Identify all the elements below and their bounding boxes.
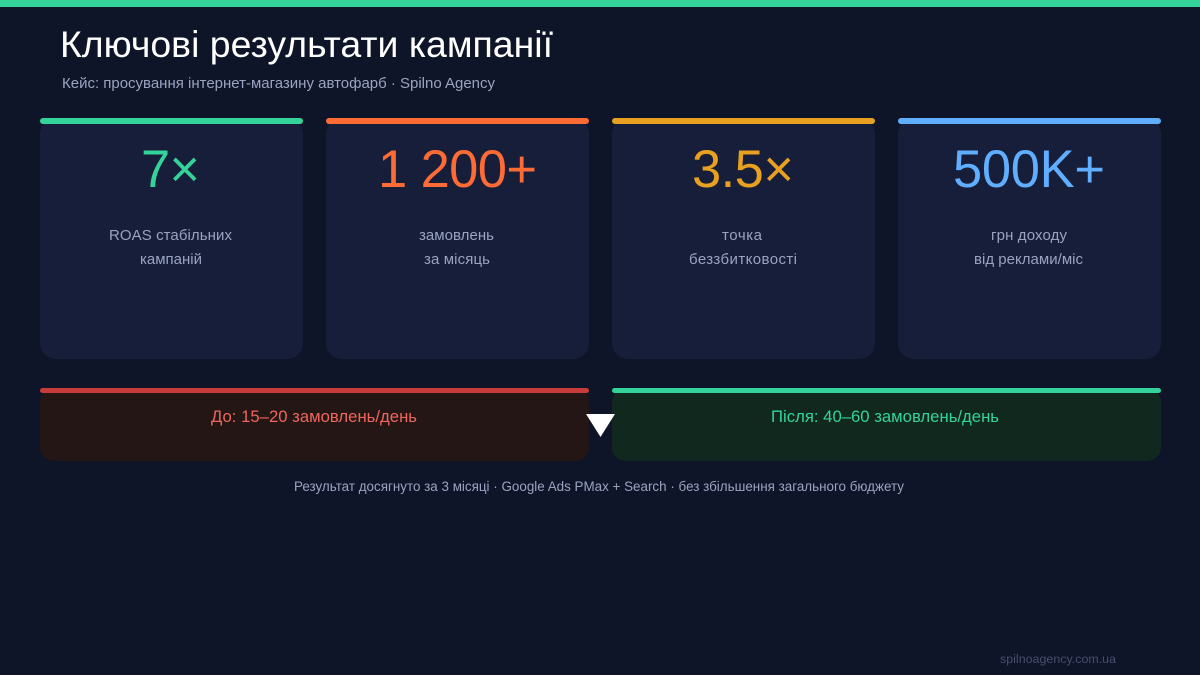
footnote: Результат досягнуто за 3 місяці · Google Ads PMax + Search · без збільшення загального бюджету bbox=[294, 479, 904, 494]
subtitle: Кейс: просування інтернет-магазину автофарб · Spilno Agency bbox=[62, 75, 496, 92]
label: ROAS: ROAS стабільних bbox=[109, 227, 232, 244]
panel: before bbox=[40, 388, 589, 461]
metric: 3.5x: 3.5× bbox=[692, 140, 794, 199]
title: Ключові результати кампанії bbox=[60, 23, 554, 65]
metric: 7x: 7× bbox=[141, 140, 200, 199]
label: break-even bbox=[689, 227, 797, 268]
website: spilnoagency.com.ua bbox=[1000, 652, 1116, 666]
metric: 500K+: 500K+ bbox=[953, 140, 1105, 199]
metric: 1200+: 1 200+ bbox=[378, 140, 537, 199]
label: orders bbox=[419, 227, 494, 268]
panel: revenue bbox=[898, 118, 1161, 359]
panel: break-even bbox=[612, 118, 875, 359]
label: revenue: від реклами/міс bbox=[974, 251, 1084, 268]
after text: Після: 40–60 замовлень/день bbox=[771, 407, 999, 426]
top accent bar bbox=[0, 0, 1200, 7]
label: revenue: грн доходу bbox=[991, 227, 1068, 244]
panel: ROAS bbox=[40, 118, 303, 359]
panel: orders bbox=[326, 118, 589, 359]
before text: До: 15–20 замовлень/день bbox=[211, 407, 417, 426]
label: break-even: точка bbox=[722, 227, 763, 244]
label: orders: за місяць bbox=[424, 251, 490, 268]
panel: after bbox=[612, 388, 1161, 461]
label: revenue bbox=[974, 227, 1084, 268]
label: break-even: беззбитковості bbox=[689, 251, 797, 268]
label: orders: замовлень bbox=[419, 227, 494, 244]
label: ROAS: кампаній bbox=[140, 251, 202, 268]
arrow: before to after bbox=[586, 414, 615, 437]
label: ROAS bbox=[109, 227, 232, 268]
